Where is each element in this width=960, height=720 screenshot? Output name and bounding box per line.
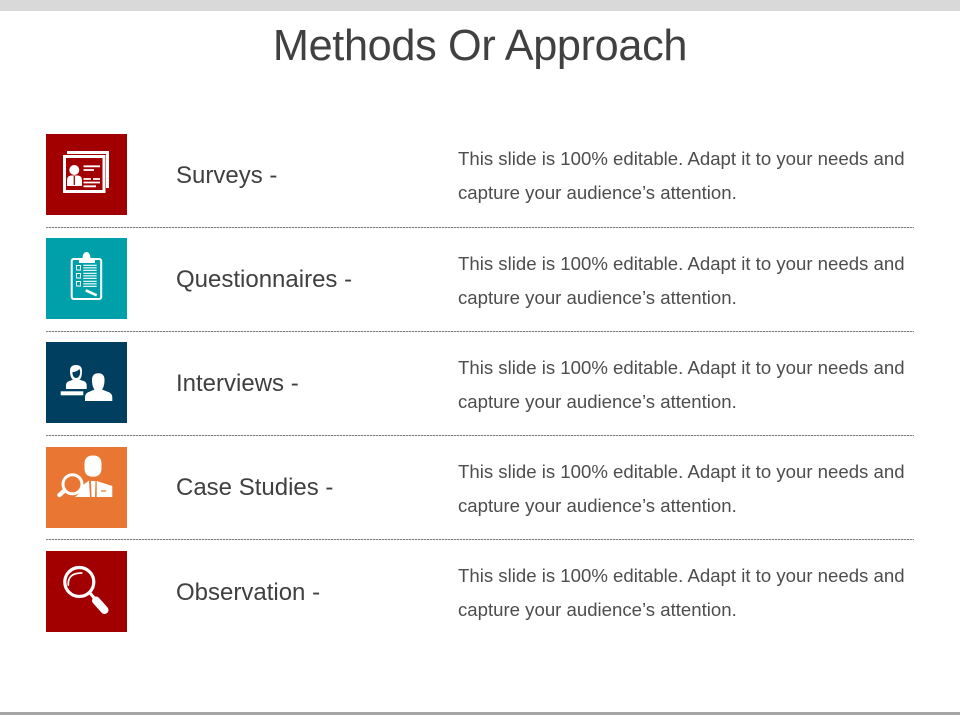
icon: surveys profile cards (46, 134, 127, 215)
title: Methods Or Approach (273, 21, 687, 70)
description: questionnaires: capture your audience’s attention. (458, 287, 737, 308)
description: case studies: capture your audience’s attention. (458, 495, 737, 516)
label: observation: Observation - (176, 579, 320, 606)
divider (46, 227, 914, 228)
description: case studies (458, 461, 905, 516)
icon: clipboard checklist (46, 238, 127, 319)
row: surveys (46, 134, 905, 215)
divider (46, 435, 914, 436)
top bar (0, 0, 960, 11)
row: observation (46, 551, 905, 632)
description: questionnaires (458, 253, 905, 308)
row: questionnaires (46, 238, 905, 319)
label: interviews: Interviews - (176, 370, 299, 397)
description: observation: capture your audience’s attention. (458, 599, 737, 620)
bottom bar (0, 712, 960, 715)
description: observation (458, 565, 905, 620)
description: surveys: This slide is 100% editable. Adapt it to your needs and (458, 148, 905, 169)
label: surveys: Surveys - (176, 162, 277, 189)
description: surveys (458, 148, 905, 203)
row: case studies (46, 447, 905, 528)
description: observation: This slide is 100% editable. Adapt it to your needs and (458, 565, 905, 586)
label: case studies: Case Studies - (176, 474, 333, 501)
divider (46, 331, 914, 332)
icon: businessman with magnifier (46, 447, 127, 528)
description: questionnaires: This slide is 100% editable. Adapt it to your needs and (458, 253, 905, 274)
row: interviews (46, 342, 905, 423)
description: interviews: capture your audience’s attention. (458, 391, 737, 412)
description: interviews: This slide is 100% editable. Adapt it to your needs and (458, 357, 905, 378)
label: questionnaires: Questionnaires - (176, 266, 352, 293)
description: interviews (458, 357, 905, 412)
description: case studies: This slide is 100% editable. Adapt it to your needs and (458, 461, 905, 482)
divider (46, 539, 914, 540)
icon: magnifying glass (46, 551, 127, 632)
description: surveys: capture your audience’s attention. (458, 182, 737, 203)
icon: two people interview (46, 342, 127, 423)
